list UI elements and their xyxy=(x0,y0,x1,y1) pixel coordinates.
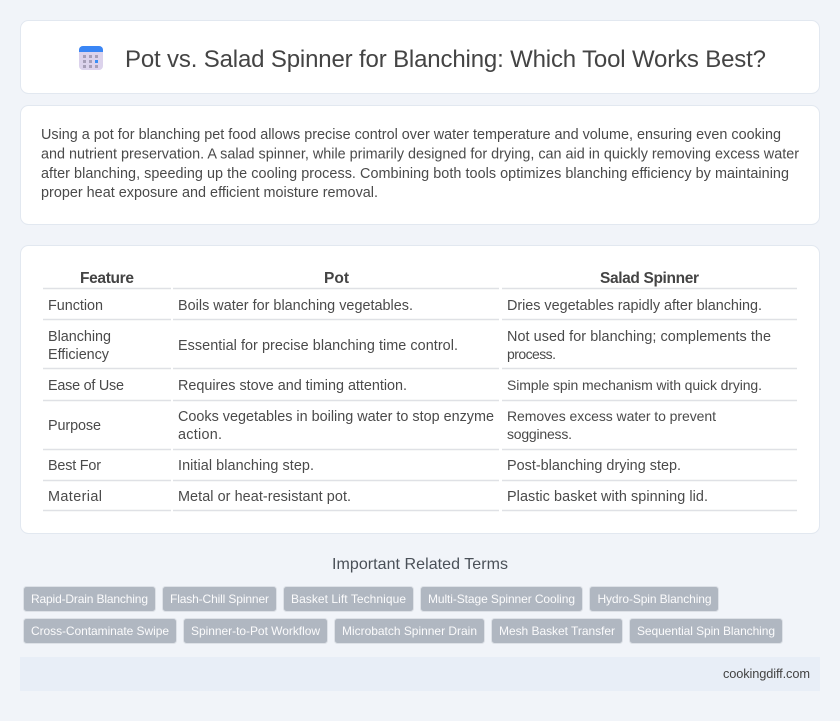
tag: Sequential Spin Blanching xyxy=(637,624,775,638)
footer bar xyxy=(20,657,820,691)
table header row: Salad Spinner xyxy=(600,270,699,287)
row: blanching efficiency xyxy=(48,329,771,363)
tag xyxy=(492,618,622,644)
row: blanching efficiency: Efficiency xyxy=(48,347,110,363)
tag: Multi-Stage Spinner Cooling xyxy=(428,592,575,606)
tag: Mesh Basket Transfer xyxy=(499,624,615,638)
description text: Using a pot for blanching pet food allows precise control over water temperature and volume, ensuring even cooking xyxy=(41,127,781,143)
tag: Flash-Chill Spinner xyxy=(170,592,269,606)
tag: Hydro-Spin Blanching xyxy=(598,592,712,606)
row: purpose: sogginess. xyxy=(507,426,572,442)
table header row: Pot xyxy=(324,270,349,287)
row: blanching efficiency: Essential for precise blanching time control. xyxy=(178,338,458,354)
row: purpose: action. xyxy=(178,427,222,443)
panel: comparison table xyxy=(20,246,820,534)
row: material: Metal or heat-resistant pot. xyxy=(178,489,351,505)
row: best for: Best For xyxy=(48,458,101,474)
row: material xyxy=(48,489,708,505)
tag xyxy=(334,618,484,644)
row: best for: Post-blanching drying step. xyxy=(507,458,681,474)
row: material: Plastic basket with spinning lid. xyxy=(507,489,708,505)
tag xyxy=(184,618,328,644)
row: best for xyxy=(48,458,681,474)
icon: calendar xyxy=(79,46,103,70)
footer source: cookingdiff.com xyxy=(723,666,810,681)
row: blanching efficiency: Blanching xyxy=(48,329,111,345)
heading: important related terms: Important Related Terms xyxy=(332,556,508,573)
row: purpose: Cooks vegetables in boiling water to stop enzyme xyxy=(178,409,494,425)
table header row: Feature xyxy=(80,270,134,287)
tag xyxy=(24,586,156,612)
row: purpose: Removes excess water to prevent xyxy=(507,408,716,424)
tag: Microbatch Spinner Drain xyxy=(342,624,477,638)
tag: Rapid-Drain Blanching xyxy=(31,592,148,606)
row: function: Boils water for blanching vegetables. xyxy=(178,298,413,314)
row: ease of use: Simple spin mechanism with quick drying. xyxy=(507,377,762,393)
tag: Basket Lift Technique xyxy=(291,592,406,606)
tag xyxy=(630,618,782,644)
tag xyxy=(420,586,582,612)
related terms tags xyxy=(24,586,782,644)
tag xyxy=(590,586,718,612)
tag xyxy=(162,586,276,612)
tag xyxy=(24,618,176,644)
row: material: Material xyxy=(48,489,102,505)
row: ease of use: Ease of Use xyxy=(48,378,124,394)
row: best for: Initial blanching step. xyxy=(178,458,314,474)
row: blanching efficiency: process. xyxy=(507,346,556,362)
title: Pot vs. Salad Spinner for Blanching: Which Tool Works Best? xyxy=(125,46,766,73)
description text: after blanching, speeding up the cooling process. Combining both tools optimizes blanching efficiency by maintaining xyxy=(41,166,789,182)
row: ease of use: Requires stove and timing attention. xyxy=(178,378,407,394)
panel: description xyxy=(20,106,820,224)
tag: Cross-Contaminate Swipe xyxy=(31,624,169,638)
tag: Spinner-to-Pot Workflow xyxy=(191,624,320,638)
table header row xyxy=(80,270,699,287)
row: function: Function xyxy=(48,298,103,314)
row: purpose xyxy=(48,408,716,443)
description text: and nutrient preservation. A salad spinner, while primarily designed for drying, can aid in quickly removing excess water xyxy=(41,146,799,162)
row: purpose: Purpose xyxy=(48,418,101,434)
row: function xyxy=(48,298,762,314)
description text xyxy=(41,127,799,201)
description text: proper heat exposure and efficient moisture removal. xyxy=(41,185,378,201)
row: blanching efficiency: Not used for blanching; complements the xyxy=(507,329,771,345)
row: ease of use xyxy=(48,377,762,394)
header panel xyxy=(20,20,820,94)
tag xyxy=(284,586,414,612)
row: function: Dries vegetables rapidly after blanching. xyxy=(507,298,762,314)
